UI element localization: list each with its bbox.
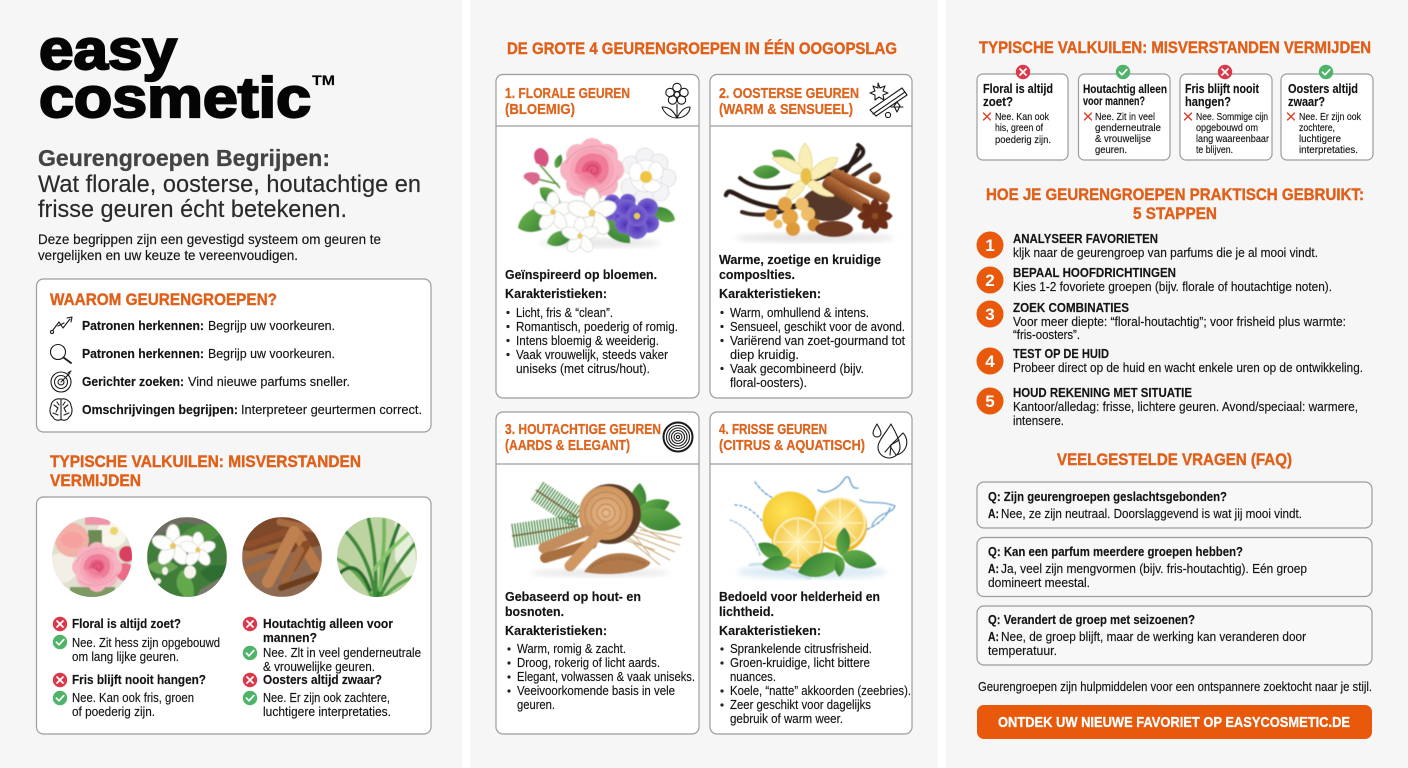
myth card: oosters: zwaar? [1288, 94, 1325, 109]
pitfall: floral: Nee. Zit hess zijn opgebouwd [72, 635, 220, 650]
title: frisse geuren écht betekenen. [38, 196, 347, 223]
myth card: oosters: luchtigere [1299, 133, 1341, 145]
card text [505, 267, 678, 376]
step 4 [976, 346, 1363, 375]
step 2: 2 [985, 271, 995, 290]
step 3: Voor meer diepte: “floral-houtachtig”; voor frisheid plus warmte: [1013, 314, 1346, 329]
faq 2: Q: Kan een parfum meerdere groepen hebben? [988, 544, 1243, 559]
photo: jasmine [147, 517, 230, 600]
icon: trend line [50, 317, 72, 334]
card text: nuances. [730, 669, 776, 684]
pitfall: floral [53, 616, 220, 664]
icon: tree rings [664, 422, 692, 452]
step 5: HOUD REKENING MET SITUATIE [1013, 385, 1192, 400]
card text: bosnoten. [505, 604, 564, 619]
intro text: Deze begrippen zijn een gevestigd systeem om geuren te [38, 231, 381, 247]
myth card: floral: his, green of [995, 122, 1043, 134]
card text: Zeer geschikt voor dagelijks [730, 697, 871, 712]
photo: green grass [335, 517, 420, 597]
myth card: houtachtig: Nee. Zit in veel [1095, 111, 1155, 123]
illustration: wood [512, 482, 683, 577]
faq 3: A: [988, 629, 999, 644]
card text: Gebaseerd op hout- en [505, 589, 641, 604]
myth card: oosters: zochtere, [1299, 122, 1335, 134]
reason row 1: Begrijp uw voorkeuren. [208, 318, 335, 333]
faq 3: Q: Verandert de groep met seizoenen? [988, 612, 1195, 627]
intro text: vergelijken en uw keuze te vereenvoudigen. [38, 247, 298, 263]
faq 2 [977, 538, 1372, 596]
card text: Sensueel, geschikt voor de avond. [730, 319, 905, 334]
pitfall: oosters: Oosters altijd zwaar? [263, 672, 382, 687]
card text: Warm, romig & zacht. [517, 641, 626, 656]
logo: easy cosmetic: cosmetic [39, 66, 311, 130]
step 5: 5 [985, 392, 995, 411]
step 2 [976, 265, 1332, 294]
intro text [38, 231, 381, 263]
heading: 5 stappen: HOE JE GEURENGROEPEN PRAKTISCH GEBRUIKT: [986, 185, 1364, 204]
myth card: oosters: interpretaties. [1299, 144, 1358, 156]
step 4: Probeer direct op de huid en wacht enkele uren op de ontwikkeling. [1013, 360, 1363, 375]
reason row 1 [82, 318, 335, 333]
panel: florale geuren [496, 74, 699, 398]
card text [719, 589, 911, 726]
step 5 [976, 385, 1358, 428]
step 1: kljk naar de geurengroep van parfums die je al mooi vindt. [1013, 245, 1318, 260]
card heading: (WARM & SENSUEEL) [719, 101, 853, 118]
title: Wat florale, oosterse, houtachtige en [38, 171, 421, 198]
card heading [505, 421, 661, 454]
icon: flower [662, 83, 690, 118]
reason row 3 [82, 374, 350, 389]
photo: roses [52, 517, 132, 597]
icon: target [51, 371, 71, 392]
faq 1: Q: Zijn geurengroepen geslachtsgebonden? [988, 489, 1227, 504]
heading: typische valkuilen left: TYPISCHE VALKUILEN: MISVERSTANDEN [50, 452, 361, 471]
step 4: TEST OP DE HUID [1013, 346, 1109, 361]
myth card: houtachtig: genderneutrale [1095, 122, 1161, 134]
card heading: (AARDS & ELEGANT) [505, 437, 630, 454]
card text: Warme, zoetige en kruidige [719, 252, 881, 267]
card text: Karakteristieken: [505, 623, 607, 638]
photo: sandalwood [242, 517, 322, 597]
heading: faq: VEELGESTELDE VRAGEN (FAQ) [1057, 450, 1292, 469]
heading: typische valkuilen left [50, 452, 361, 490]
card text: Variërend van zoet-gourmand tot [730, 333, 905, 348]
heading: 5 stappen: 5 STAPPEN [1133, 204, 1217, 223]
pitfall: oosters: luchtigere interpretaties. [263, 704, 391, 719]
icon: drops and citrus [873, 424, 907, 458]
pitfall: houtachtig: Nee. Zlt in veel genderneutrale [263, 645, 421, 660]
step 5: Kantoor/alledag: frisse, lichtere geuren. Avond/speciaal: warmere, [1013, 399, 1358, 414]
card heading [719, 421, 865, 454]
step 2: BEPAAL HOOFDRICHTINGEN [1013, 265, 1176, 280]
step 3 [976, 300, 1346, 342]
myth card: oosters [1281, 65, 1373, 160]
step 1: ANALYSEER FAVORIETEN [1013, 231, 1158, 246]
heading: 5 stappen [986, 185, 1364, 223]
pitfall: floral: Floral is altijd zoet? [72, 616, 181, 631]
myth card: houtachtig: & vrouwelijse [1095, 133, 1151, 145]
faq 2: domineert meestal. [988, 575, 1090, 590]
card text: floral-oosters). [730, 375, 807, 390]
step 3: “fris-oosters”. [1013, 327, 1080, 342]
pitfall: fris: of poederig zijn. [72, 704, 155, 719]
reason row 2: Patronen herkennen: [82, 346, 204, 361]
faq 2: Ja, veel zijn mengvormen (bijv. fris-houtachtig). Eén groep [1001, 561, 1307, 576]
faq 1: A: [988, 506, 999, 521]
pitfall: fris: Fris blijft nooit hangen? [72, 672, 206, 687]
card heading [719, 85, 859, 118]
card heading: 3. HOUTACHTIGE GEUREN [505, 421, 661, 438]
step 5: intensere. [1013, 413, 1064, 428]
cta button: ONTDEK UW NIEUWE FAVORIET OP EASYCOSMETIC.DE [998, 714, 1350, 731]
faq 3: temperatuur. [988, 643, 1057, 658]
pitfall: oosters [243, 672, 391, 719]
pitfall: houtachtig [243, 616, 421, 674]
card text [719, 252, 905, 390]
card text: Intens bloemig & weeiderig. [516, 333, 659, 348]
panel: oosterse geuren [710, 74, 912, 398]
card text: composlties. [719, 267, 795, 282]
reason row 3: Gerichter zoeken: [82, 374, 184, 389]
faq 3: Nee, de groep blijft, maar de werking kan veranderen door [1001, 629, 1307, 644]
pitfall: oosters: Nee. Er zijn ook zachtere, [263, 690, 390, 705]
card heading: 1. FLORALE GEUREN [505, 85, 630, 102]
card heading: 2. OOSTERSE GEUREN [719, 85, 859, 102]
panel: waarom geurengroepen [36, 279, 431, 432]
card text: Karakteristieken: [505, 286, 607, 301]
reason row 4: Interpreteer geurtermen correct. [241, 402, 422, 417]
faq 2: A: [988, 561, 999, 576]
card text: Elegant, volwassen & vaak uniseks. [517, 669, 695, 684]
myth card: fris [1180, 65, 1272, 160]
myth card: floral: zoet? [983, 94, 1013, 109]
card text: Romantisch, poederig of romig. [516, 319, 678, 334]
reason row 4 [82, 402, 422, 417]
pitfall: houtachtig: mannen? [263, 630, 317, 645]
myth card: fris: hangen? [1185, 94, 1231, 109]
card text [505, 589, 695, 712]
panel: houtachtige geuren [496, 412, 699, 734]
myth card: floral [977, 65, 1068, 160]
card text: Droog, rokerig of licht aards. [517, 655, 660, 670]
step 1: 1 [985, 236, 995, 255]
reason row 1: Patronen herkennen: [82, 318, 204, 333]
heading: waarom: WAAROM GEURENGROEPEN? [50, 290, 277, 309]
icon: brain [50, 399, 72, 420]
myth card: houtachtig: Houtachtig alleen [1083, 84, 1167, 96]
step 1 [976, 231, 1318, 260]
card text: Licht, fris & “clean”. [516, 305, 613, 320]
pitfall: fris [53, 672, 206, 719]
pitfall: houtachtig: Houtachtig alleen voor [263, 616, 393, 631]
step 3: 3 [985, 305, 995, 324]
card text: geuren. [517, 697, 555, 712]
myth card: fris: Nee. Sommige cijn [1196, 111, 1268, 123]
myth card: oosters: Nee. Er zijn ook [1299, 111, 1362, 123]
reason row 3: Vind nieuwe parfums sneller. [188, 374, 350, 389]
illustration: lemon and water [730, 477, 895, 583]
card text: Koele, “natte” akkoorden (zeebries). [730, 683, 911, 698]
myth card: houtachtig: geuren. [1095, 144, 1127, 156]
card text: Veeivoorkomende basis in vele [517, 683, 675, 698]
title [38, 145, 421, 223]
myth card: floral: poederig zijn. [995, 134, 1051, 146]
card heading: (CITRUS & AQUATISCH) [719, 437, 865, 454]
myth card: fris: Fris blijft nooit [1185, 81, 1260, 96]
logo: easy cosmetic: easy [39, 18, 177, 82]
faq 1 [977, 482, 1372, 528]
icon: magnifier [50, 344, 71, 363]
card text: diep kruidig. [730, 347, 799, 362]
card text: lichtheid. [719, 604, 774, 619]
cta button [977, 705, 1372, 739]
panel: frisse geuren [710, 412, 912, 734]
card text: Vaak vrouwelijk, steeds vaker [516, 347, 669, 362]
illustration: flowers [514, 138, 678, 255]
myth card: floral: Nee. Kan ook [995, 111, 1050, 123]
card text: Sprankelende citrusfrisheid. [730, 641, 872, 656]
card text: Bedoeld voor helderheid en [719, 589, 880, 604]
icon: spices [870, 83, 907, 118]
myth card: oosters: Oosters altijd [1288, 81, 1358, 96]
heading: de grote 4: DE GROTE 4 GEURENGROEPEN IN ÉÉN OOGOPSLAG [507, 39, 897, 58]
heading: typische valkuilen left: VERMIJDEN [50, 471, 141, 490]
card text: gebruik of warm weer. [730, 711, 843, 726]
step 2: Kies 1-2 fovoriete groepen (bijv. florale of houtachtige noten). [1013, 279, 1332, 294]
card text: uniseks (met citrus/hout). [516, 361, 650, 376]
reason row 2: Begrijp uw voorkeuren. [208, 346, 335, 361]
step 3: ZOEK COMBINATIES [1013, 300, 1129, 315]
myth card: fris: lang waareenbaar [1196, 133, 1269, 145]
card heading [505, 85, 630, 118]
reason row 2 [82, 346, 335, 361]
logo: easy cosmetic: TM [312, 72, 335, 88]
reason row 4: Omschrijvingen begrijpen: [82, 402, 238, 417]
step 4: 4 [985, 352, 995, 371]
panel: valkuilen left [36, 497, 431, 734]
pitfall: fris: Nee. Kan ook fris, groen [72, 690, 194, 705]
faq 3 [977, 606, 1372, 665]
title: Geurengroepen Begrijpen: [38, 145, 330, 171]
card heading: (BLOEMIG) [505, 101, 575, 118]
card text: Geïnspireerd op bloemen. [505, 267, 657, 282]
myth card: floral: Floral is altijd [983, 81, 1053, 96]
illustration: vanilla and spices [726, 143, 895, 243]
pitfall: floral: om lang lijke geuren. [72, 649, 179, 664]
card text: Vaak gecombineerd (bijv. [730, 361, 864, 376]
card text: Karakteristieken: [719, 623, 821, 638]
logo: easy cosmetic [39, 18, 335, 130]
myth card: fris: opgebouwd om [1196, 122, 1258, 134]
card text: Groen-kruidige, licht bittere [730, 655, 870, 670]
pitfall: houtachtig: & vrouwelijke geuren. [263, 659, 375, 674]
card text: Warm, omhullend & intens. [730, 305, 869, 320]
faq 1: Nee, ze zijn neutraal. Doorslaggevend is wat jij mooi vindt. [1001, 506, 1302, 521]
card heading: 4. FRISSE GEUREN [719, 421, 827, 438]
myth card: fris: te blijven. [1196, 144, 1233, 156]
card text: Karakteristieken: [719, 286, 821, 301]
myth card: houtachtig: voor mannen? [1083, 96, 1145, 108]
myth card: houtachtig [1078, 65, 1170, 160]
